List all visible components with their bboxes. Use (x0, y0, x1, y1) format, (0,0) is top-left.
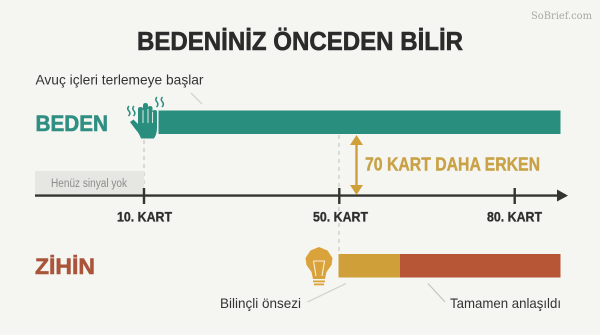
arrow: gap between body and mind (350, 135, 363, 195)
timeline axis (35, 188, 568, 204)
callout: 70 cards earlier: 70 KART DAHA ERKEN (365, 154, 540, 174)
watermark: SoBrief.com (531, 10, 592, 22)
dashed guide at card 10 (143, 140, 145, 188)
hunch label: Bilinçli önsezi (220, 295, 301, 311)
body annotation leader line (191, 93, 202, 104)
body label: BEDEN (36, 111, 108, 136)
icon: sweating hand (128, 97, 163, 138)
mind bar: conscious hunch segment (338, 254, 400, 278)
dashed guide at card 50 (338, 135, 340, 254)
mind bar: full understanding segment (400, 254, 560, 278)
understanding leader line (428, 284, 445, 302)
icon: light bulb (306, 247, 332, 285)
tick label: card 80: 80. KART (487, 208, 542, 224)
tick label: card 10: 10. KART (117, 208, 172, 224)
no signal yet box (35, 171, 144, 194)
title: BEDENİNİZ ÖNCEDEN BİLİR (137, 26, 463, 56)
hunch leader line (308, 284, 346, 302)
mind label: ZİHİN (35, 254, 95, 279)
no signal yet box: Henüz sinyal yok (51, 178, 127, 190)
body signal bar (158, 110, 560, 134)
understanding label: Tamamen anlaşıldı (450, 295, 561, 311)
body annotation text: Avuç içleri terlemeye başlar (36, 72, 204, 88)
tick label: card 50: 50. KART (313, 208, 368, 224)
